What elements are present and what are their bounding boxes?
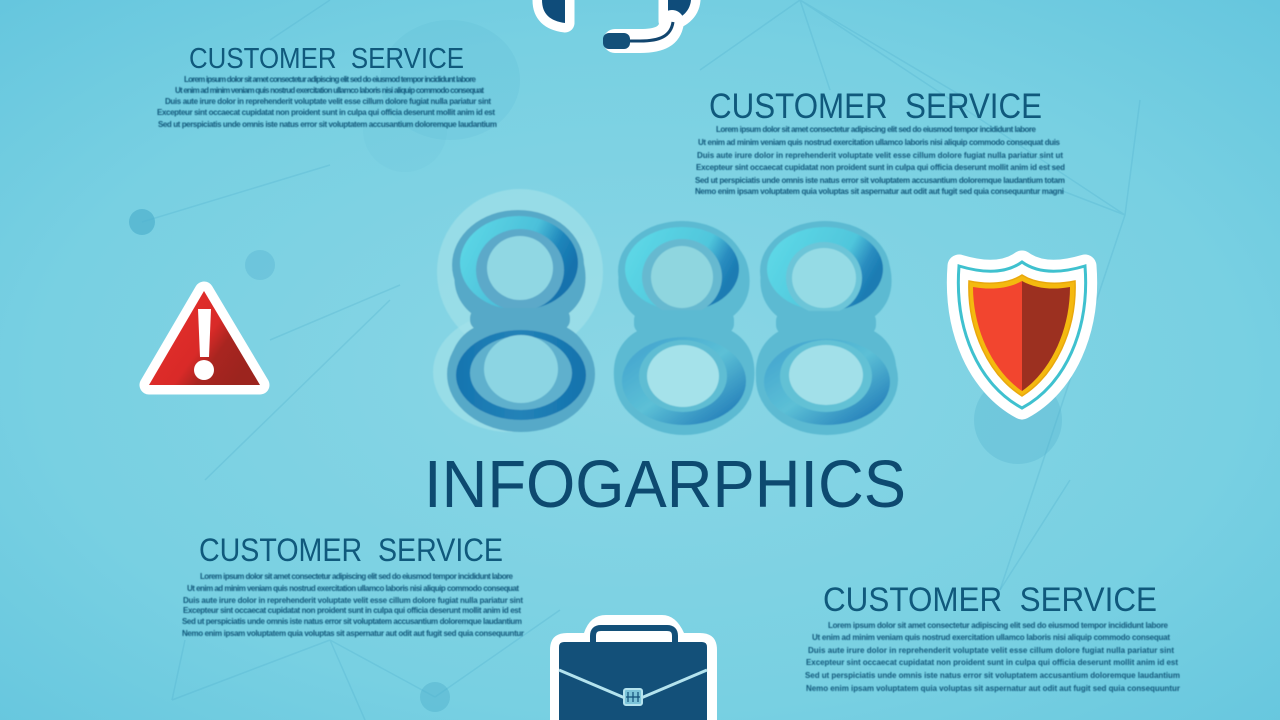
body text: Ut enim ad minim veniam quis nostrud exercitation ullamco laboris nisi aliquip commodo consequat — [812, 633, 1170, 642]
body text: Excepteur sint occaecat cupidatat non proident sunt in culpa qui officia deserunt mollit anim id est — [183, 606, 521, 615]
body text: Lorem ipsum dolor sit amet consectetur adipiscing elit sed do eiusmod tempor incididunt labore — [200, 572, 514, 581]
body text — [695, 125, 1065, 196]
body text — [157, 75, 497, 129]
body text: Sed ut perspiciatis unde omnis iste natus error sit voluptatem accusantium doloremque laudantium — [805, 671, 1180, 680]
background network pattern — [129, 0, 1140, 720]
body text: Excepteur sint occaecat cupidatat non proident sunt in culpa qui officia deserunt mollit anim id est — [806, 658, 1178, 667]
body text: Excepteur sint occaecat cupidatat non proident sunt in culpa qui officia deserunt mollit anim id est sed — [696, 163, 1065, 172]
body text: Nemo enim ipsam voluptatem quia voluptas sit aspernatur aut odit aut fugit sed quia consequuntur magni — [695, 187, 1064, 196]
body text: Nemo enim ipsam voluptatem quia voluptas sit aspernatur aut odit aut fugit sed quia consequuntur — [806, 684, 1180, 693]
body text — [182, 572, 524, 638]
body text: Duis aute irure dolor in reprehenderit voluptate velit esse cillum dolore fugiat nulla pariatur sint ut — [697, 151, 1063, 160]
heading: CUSTOMER SERVICE — [189, 43, 464, 75]
body text: Lorem ipsum dolor sit amet consectetur adipiscing elit sed do eiusmod tempor incididunt labore — [184, 75, 477, 84]
body text: Sed ut perspiciatis unde omnis iste natus error sit voluptatem accusantium doloremque laudantium — [182, 617, 522, 626]
body text: Lorem ipsum dolor sit amet consectetur adipiscing elit sed do eiusmod tempor incididunt labore — [716, 125, 1037, 134]
panel: customer service bottom right — [805, 581, 1180, 693]
body text: Ut enim ad minim veniam quis nostrud exercitation ullamco laboris nisi aliquip commodo consequat duis — [698, 138, 1061, 147]
panel: customer service top left — [157, 43, 497, 129]
body text: Nemo enim ipsam voluptatem quia voluptas sit aspernatur aut odit aut fugit sed quia consequuntur — [182, 629, 524, 638]
body text: Duis aute irure dolor in reprehenderit voluptate velit esse cillum dolore fugiat nulla pariatur sint — [808, 646, 1174, 655]
digit 8 third: 8 — [747, 171, 905, 489]
title: INFOGARPHICS — [424, 447, 906, 522]
body text: Ut enim ad minim veniam quis nostrud exercitation ullamco laboris nisi aliquip commodo consequat — [175, 86, 484, 95]
digit 8 second: 8 — [605, 171, 763, 489]
heading: CUSTOMER SERVICE — [823, 581, 1157, 619]
icon: shield — [958, 262, 1086, 408]
digit 8 first: 8 — [441, 168, 599, 486]
icon: briefcase — [550, 615, 717, 720]
body text: Sed ut perspiciatis unde omnis iste natus error sit voluptatem accusantium doloremque laudantium — [158, 120, 497, 129]
body text: Excepteur sint occaecat cupidatat non proident sunt in culpa qui officia deserunt mollit anim id est — [157, 108, 495, 117]
body text — [805, 621, 1180, 693]
icon: headset — [542, 0, 691, 49]
body text: Lorem ipsum dolor sit amet consectetur adipiscing elit sed do eiusmod tempor incididunt labore — [828, 621, 1169, 630]
heading: CUSTOMER SERVICE — [709, 87, 1042, 126]
heading: CUSTOMER SERVICE — [199, 532, 503, 568]
halo behind first digit — [433, 189, 603, 432]
body text: Duis aute irure dolor in reprehenderit voluptate velit esse cillum dolore fugiat nulla pariatur sint — [165, 97, 491, 106]
body text: Duis aute irure dolor in reprehenderit voluptate velit esse cillum dolore fugiat nulla pariatur sint — [183, 596, 523, 605]
panel: customer service top right — [695, 87, 1065, 196]
icon: warning triangle — [149, 291, 260, 385]
number 888 — [433, 168, 905, 489]
body text: Sed ut perspiciatis unde omnis iste natus error sit voluptatem accusantium doloremque laudantium totam — [695, 176, 1065, 185]
body text: Ut enim ad minim veniam quis nostrud exercitation ullamco laboris nisi aliquip commodo consequat — [187, 584, 519, 593]
panel: customer service bottom left — [182, 532, 524, 638]
